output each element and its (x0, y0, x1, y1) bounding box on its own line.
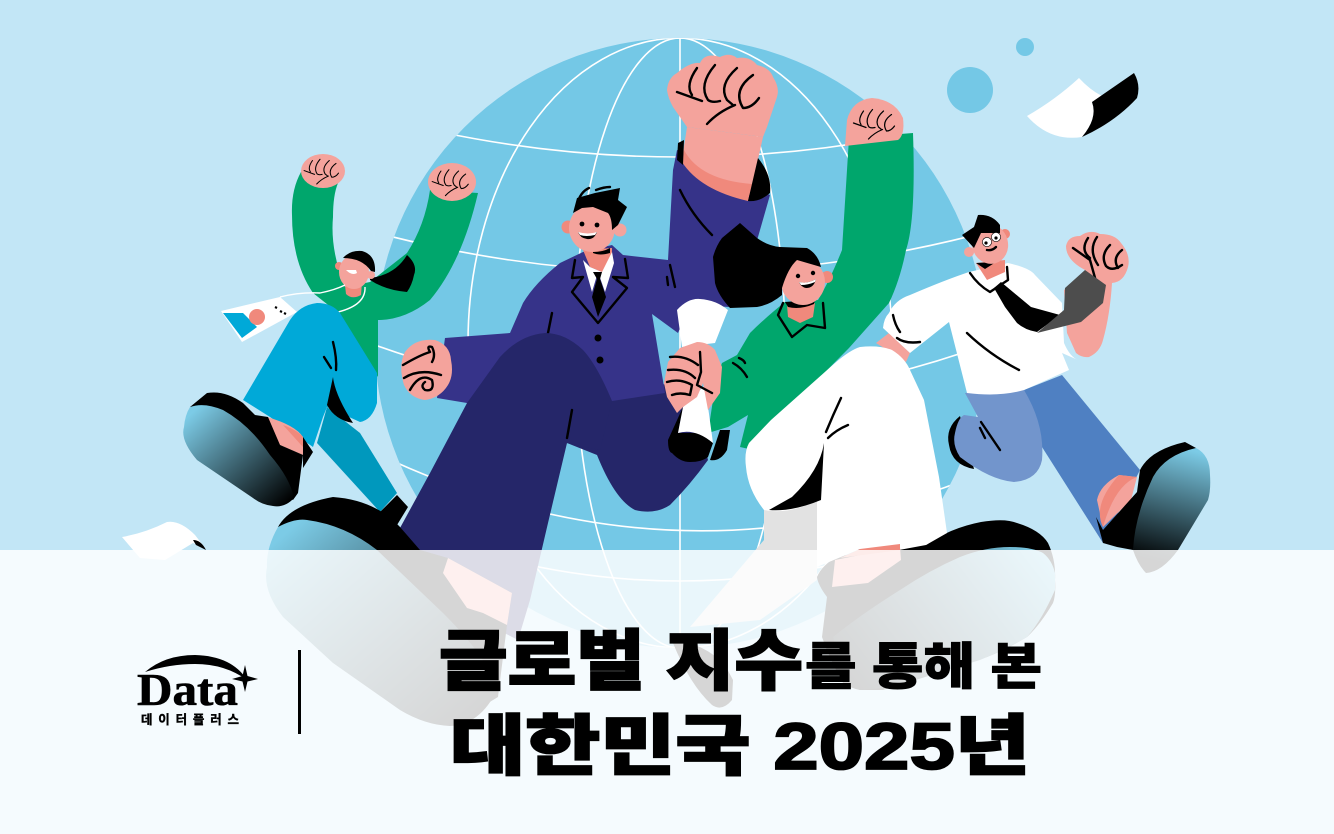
buttons (594, 334, 602, 342)
figure: man in navy suit, centre (266, 55, 778, 726)
head (339, 255, 369, 289)
logo wordmark: Data (137, 665, 238, 715)
collar (970, 267, 1008, 292)
glasses (982, 237, 992, 247)
id card dots (275, 307, 286, 314)
white shirt (583, 252, 614, 292)
front trouser leg (954, 390, 1042, 482)
logo star (232, 665, 258, 692)
id card triangle (223, 313, 257, 338)
shirt (883, 263, 1078, 394)
fist (1066, 232, 1129, 283)
small back shoe (380, 495, 408, 525)
front trouser leg (400, 333, 612, 640)
hair (962, 215, 1000, 248)
eyes (580, 222, 584, 226)
shoe upper (190, 392, 303, 500)
big shoe upper (278, 497, 512, 726)
logo korean name: 데이터플러스 (141, 713, 239, 727)
smile (346, 270, 357, 274)
dark scroll shadow (710, 430, 730, 460)
ears (771, 279, 783, 291)
id card (221, 297, 297, 342)
green sweater and raised arm (708, 133, 914, 449)
title line 1 small: 를 통해 본 (805, 639, 1042, 695)
translucent bottom band (0, 550, 1334, 834)
globe (375, 38, 985, 648)
front trousers (243, 303, 377, 447)
paper in hand (1037, 270, 1106, 333)
shoe upper (817, 520, 1055, 690)
back leg (317, 407, 397, 512)
ankle (443, 558, 512, 625)
ears (562, 220, 574, 234)
title line 1 large: 글로벌 지수 (439, 624, 803, 698)
tie (994, 282, 1060, 332)
scroll lower (668, 407, 713, 462)
tie (592, 272, 606, 317)
shoe upper (1096, 442, 1196, 550)
eyes (796, 274, 800, 278)
wrist shading (682, 150, 752, 201)
ankle (267, 417, 313, 468)
necklace and card cord (280, 285, 365, 312)
ears (964, 247, 974, 257)
fist right (428, 163, 476, 201)
back trouser leg (567, 380, 708, 512)
sleeve lines (733, 358, 747, 377)
decorative circle small (1016, 38, 1034, 56)
collar (778, 303, 825, 337)
divider line (298, 650, 301, 734)
front white trouser (745, 346, 947, 567)
big shoe sole (266, 520, 497, 726)
foot skin (1097, 475, 1137, 527)
head (967, 220, 1013, 268)
arm skin (1064, 270, 1112, 357)
head (569, 204, 615, 252)
foot skin (832, 547, 901, 587)
figure: woman in green, centre right (664, 98, 1055, 708)
logo swoosh (145, 655, 247, 680)
faded tail under shoe (673, 643, 733, 708)
shoe sole (833, 547, 1055, 690)
id card circle (249, 309, 265, 325)
scroll top (677, 299, 728, 347)
ponytail (370, 255, 415, 292)
fist on left arm (401, 340, 452, 400)
hand (664, 342, 722, 413)
chin shadow (593, 248, 610, 254)
smile (799, 279, 816, 288)
decorative circle large (947, 67, 993, 113)
title (439, 624, 1042, 783)
flying paper bottom left (122, 522, 206, 560)
flying paper top right (1027, 73, 1138, 138)
neck (583, 248, 612, 272)
knee shadow (769, 443, 824, 510)
green sweater and arms (292, 172, 478, 377)
hair (573, 188, 627, 230)
suit jacket (437, 150, 770, 403)
trouser crease (567, 410, 572, 438)
sleeve opening (677, 140, 770, 201)
figure: woman in green, left (183, 154, 478, 525)
shoe sole (183, 405, 294, 506)
logo: Data plus (137, 655, 258, 727)
back trouser leg (1024, 375, 1140, 543)
hair (343, 251, 375, 272)
smile (578, 232, 597, 239)
neck (976, 260, 1005, 280)
elbow (876, 333, 910, 362)
raised fist (845, 98, 903, 146)
hair (713, 223, 821, 308)
head (781, 259, 825, 305)
neck (787, 303, 815, 323)
fist left (301, 154, 345, 188)
lapels (572, 259, 628, 323)
back white trouser leg (690, 500, 817, 627)
shoe sole (1133, 448, 1210, 573)
big fist (667, 55, 778, 137)
back shoe (948, 416, 974, 469)
knee shadow (327, 377, 353, 423)
figure: man in white shirt, right (876, 215, 1210, 573)
title line 2: 대한민국 2025년 (450, 709, 1030, 783)
ears (335, 262, 343, 270)
neck (345, 282, 362, 297)
raised forearm (683, 127, 763, 195)
